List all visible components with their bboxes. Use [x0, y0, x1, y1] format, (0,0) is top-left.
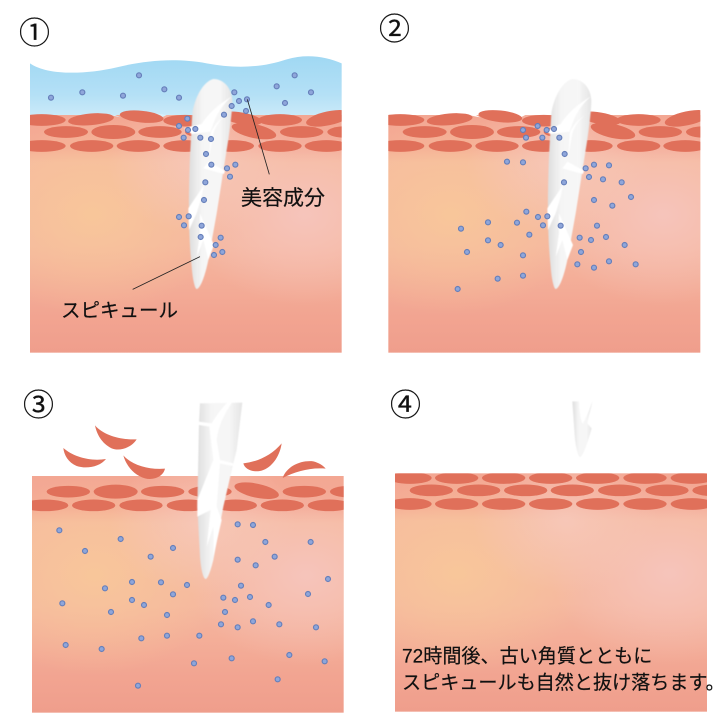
- step number 4: ④: [390, 388, 421, 423]
- skin block: [32, 476, 344, 713]
- water gap: [110, 113, 167, 118]
- spicule needle: [546, 79, 593, 289]
- peeling flakes: [63, 425, 326, 479]
- fallen spicule tip: [572, 401, 592, 457]
- spicule needle: [184, 79, 234, 289]
- label: spicule: スピキュール: [61, 300, 178, 322]
- caption: [402, 646, 720, 694]
- step number 2: ②: [379, 12, 410, 47]
- beauty ingredient particles: [48, 73, 313, 257]
- panel 3: old stratum flaking off: [32, 402, 344, 713]
- panel 2: ingredients spreading: [376, 79, 720, 353]
- water layer: [30, 56, 342, 120]
- skin cell layers: [30, 110, 342, 152]
- white gap: [468, 113, 525, 118]
- skin cell layers: [388, 472, 720, 510]
- skin block: [388, 115, 700, 353]
- step number 3: ③: [23, 388, 54, 423]
- leader lines: [133, 99, 269, 289]
- caption: スピキュールも自然と抜け落ちます。: [402, 672, 720, 694]
- beauty ingredient particles: [455, 123, 638, 291]
- spicule needle: [197, 403, 242, 579]
- skin cell layers: [32, 482, 344, 512]
- panel 4: spicule naturally falls out: [388, 401, 720, 712]
- beauty ingredient particles: [57, 522, 330, 688]
- skin block: [395, 473, 707, 712]
- caption: 72時間後、古い角質とともに: [402, 646, 652, 668]
- step number 1: ①: [19, 16, 50, 51]
- label: beauty ingredient: 美容成分: [241, 187, 325, 210]
- skin block: [30, 115, 342, 353]
- panel 1: spicule inserted with beauty ingredients: [30, 56, 342, 353]
- skin cell layers: [388, 110, 700, 152]
